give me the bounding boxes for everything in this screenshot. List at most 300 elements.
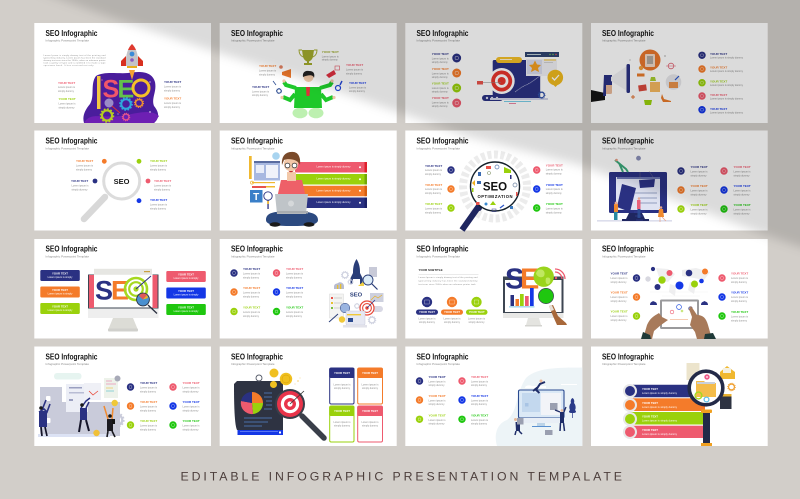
labels and markers: YOUR TEXT xyxy=(432,52,449,56)
heading: SEO Infographic xyxy=(46,29,98,38)
labels: simply dummy xyxy=(164,106,181,109)
labels: Lorem ipsum is xyxy=(252,90,270,94)
labels and markers: YOUR TEXT xyxy=(471,413,488,417)
markers and labels: Lorem ipsum is simply dummy xyxy=(710,98,744,100)
heading: SEO Infographic xyxy=(231,137,283,146)
labels and markers: Lorem ipsum is xyxy=(690,190,708,192)
text block: specimen book. It has survived not only xyxy=(44,64,94,67)
labels and markers: Lorem ipsum is xyxy=(734,190,751,192)
labels: YOUR TEXT xyxy=(164,80,181,84)
subtitle: Infographic Powerpoint Template xyxy=(416,362,461,366)
labels and markers: simply dummy xyxy=(734,174,750,178)
three step pills xyxy=(416,297,488,324)
diagonal light and shadow overlay xyxy=(40,0,800,260)
text block xyxy=(44,54,106,67)
panel: slide 14 analytics board and cards xyxy=(220,346,397,446)
stacked list bars: Lorem ipsum is simply dummy xyxy=(642,433,678,436)
illustration: people at dashboard xyxy=(38,373,124,437)
labels and dots: Lorem ipsum is xyxy=(76,164,94,168)
panel: slide 3 target dashboard xyxy=(405,23,582,123)
icon: trophy xyxy=(299,50,317,65)
right buttons: Lorem ipsum is simply xyxy=(174,310,199,313)
labels: YOUR TEXT xyxy=(58,97,76,101)
illustration: purple blob with SEO letters and gears: E xyxy=(118,76,134,104)
subtitle: Infographic Powerpoint Template xyxy=(602,39,646,43)
labels and markers: simply dummy xyxy=(734,194,750,196)
subtitle block xyxy=(418,268,478,286)
labels and markers: Lorem ipsum is xyxy=(734,208,751,212)
labels and markers: simply dummy xyxy=(286,315,303,318)
illustration: design tools xyxy=(249,152,280,209)
labels and markers: YOUR TEXT xyxy=(546,202,563,206)
illustration: desktop monitor with SEO target xyxy=(88,269,158,332)
labels and markers: Lorem ipsum is xyxy=(425,169,443,172)
labels and markers: Lorem ipsum is xyxy=(432,87,449,90)
labels and markers: simply dummy xyxy=(182,390,199,394)
subtitle: Infographic Powerpoint Template xyxy=(602,146,646,150)
three step pills: Lorem ipsum is xyxy=(444,318,461,320)
subtitle: Infographic Powerpoint Template xyxy=(231,362,275,366)
markers and labels: YOUR TEXT xyxy=(710,52,727,56)
stacked list bars: YOUR TEXT xyxy=(642,387,658,391)
illustration: shopping icons cluster xyxy=(629,50,681,105)
labels and markers: YOUR TEXT xyxy=(546,164,563,168)
four cards: simply dummy xyxy=(362,387,379,390)
three step pills: Lorem ipsum is xyxy=(419,318,436,320)
labels and markers: simply dummy xyxy=(610,300,627,303)
labels: simply dummy xyxy=(349,90,366,93)
labels and markers: simply dummy xyxy=(140,428,157,432)
illustration: world map dots xyxy=(645,267,710,305)
labels and markers: Lorem ipsum is xyxy=(428,380,446,384)
panel: slide 4 megaphone xyxy=(591,23,768,123)
labels and markers xyxy=(610,272,749,322)
four cards xyxy=(329,368,383,442)
labels: YOUR TEXT xyxy=(322,50,339,54)
heading: SEO Infographic xyxy=(602,352,654,361)
left buttons xyxy=(40,270,80,314)
labels and markers: YOUR TEXT xyxy=(731,272,748,276)
labels and markers: simply dummy xyxy=(140,390,157,394)
labels and markers: Lorem ipsum is xyxy=(610,315,628,318)
four cards: simply dummy xyxy=(334,387,351,390)
heading: SEO Infographic xyxy=(231,29,283,38)
four cards: YOUR TEXT xyxy=(362,409,378,413)
labels and markers: simply dummy xyxy=(182,428,199,432)
subtitle: Infographic Powerpoint Template xyxy=(602,362,646,366)
labels and markers: Lorem ipsum is xyxy=(731,316,749,318)
heading: SEO Infographic xyxy=(46,352,98,361)
stacked list bars: Lorem ipsum is simply dummy xyxy=(642,420,678,422)
panel: slide 9 monitor with SEO xyxy=(34,239,211,338)
labels and markers: simply dummy xyxy=(432,105,448,108)
labels and markers: YOUR TEXT xyxy=(690,184,708,188)
subtitle block: YOUR SUBTITLE xyxy=(418,268,443,272)
labels and markers: Lorem ipsum is xyxy=(140,406,158,408)
labels and markers xyxy=(416,375,489,425)
heading: SEO Infographic xyxy=(416,352,469,361)
labels and markers: YOUR TEXT xyxy=(182,381,200,385)
four cards: Lorem ipsum is xyxy=(334,384,351,386)
labels and markers: YOUR TEXT xyxy=(432,96,449,100)
panel: slide 13 team at dashboard xyxy=(34,346,211,446)
labels and markers: Lorem ipsum is xyxy=(432,58,449,60)
right buttons: Lorem ipsum is simply xyxy=(174,294,199,296)
labels: simply dummy xyxy=(252,94,269,97)
panel: slide 15 desktop team xyxy=(405,346,582,446)
labels: simply dummy xyxy=(322,58,338,62)
text block: Lorem Ipsum is simply dummy text of the printing and xyxy=(44,54,106,57)
labels and dots: YOUR TEXT xyxy=(76,159,93,163)
labels and markers xyxy=(432,52,461,108)
labels and markers: Lorem ipsum is xyxy=(243,292,261,294)
labels and markers: Lorem ipsum is xyxy=(731,296,749,299)
lens with SEO optimization xyxy=(462,154,527,230)
labels and markers: YOUR TEXT xyxy=(690,203,708,207)
three step pills: simply dummy xyxy=(469,321,485,324)
labels and markers: simply dummy xyxy=(428,403,445,406)
illustration: desktop monitor with SEO target: S xyxy=(95,276,113,306)
left buttons: Lorem ipsum is simply xyxy=(48,309,73,312)
panel: slide 6 man with laptop xyxy=(220,130,397,230)
stacked list bars: Lorem ipsum is simply dummy xyxy=(642,392,678,395)
labels and dots: YOUR TEXT xyxy=(154,179,171,183)
labels and markers: YOUR TEXT xyxy=(432,82,449,86)
illustration: monitor, target and check badge xyxy=(477,52,563,104)
labels and markers: Lorem ipsum is xyxy=(182,386,200,390)
labels and markers: YOUR TEXT xyxy=(731,290,748,294)
left buttons: Lorem ipsum is simply xyxy=(48,276,73,279)
labels and markers: simply dummy xyxy=(734,212,750,216)
labels and markers: Lorem ipsum is xyxy=(690,208,708,212)
labels and markers: YOUR TEXT xyxy=(471,394,488,398)
labels: YOUR TEXT xyxy=(346,63,363,67)
labels and markers: simply dummy xyxy=(690,194,707,196)
labels and markers: simply dummy xyxy=(690,174,707,178)
stacked list bars: YOUR TEXT xyxy=(642,428,658,432)
labels and markers: simply dummy xyxy=(140,410,157,412)
four cards: simply dummy xyxy=(334,424,351,428)
labels and dots: YOUR TEXT xyxy=(150,159,167,163)
illustration: monitor with people xyxy=(597,156,672,222)
stacked bars: Lorem ipsum is simply dummy xyxy=(316,166,351,169)
labels and markers: Lorem ipsum is xyxy=(432,102,449,104)
labels and markers: Lorem ipsum is xyxy=(243,272,261,276)
labels: Lorem ipsum is xyxy=(164,102,182,105)
labels: YOUR TEXT xyxy=(164,96,181,100)
labels and markers: simply dummy xyxy=(428,422,445,425)
stacked bars: Lorem ipsum is simply dummy xyxy=(316,178,351,181)
labels and markers: YOUR TEXT xyxy=(182,419,200,423)
labels and dots: simply dummy xyxy=(76,168,93,172)
illustration: man with glasses and laptop xyxy=(266,152,318,227)
labels: simply dummy xyxy=(259,74,276,76)
markers and labels: YOUR TEXT xyxy=(710,93,727,97)
panel: slide 12 tablet and network map xyxy=(591,239,768,339)
stacked bars xyxy=(290,162,367,208)
icons around businessman xyxy=(273,65,342,94)
labels and markers: simply dummy xyxy=(610,319,627,322)
labels and dots: simply dummy xyxy=(150,168,167,172)
illustration: monitor with SEO, globe and bar chart: E xyxy=(520,264,539,296)
labels and markers: YOUR TEXT xyxy=(425,164,442,168)
labels and markers: simply dummy xyxy=(432,61,448,64)
labels and markers: Lorem ipsum is xyxy=(243,311,261,314)
labels and markers: simply dummy xyxy=(286,276,303,280)
stacked bars: Lorem ipsum is simply dummy xyxy=(316,189,351,192)
labels and markers: Lorem ipsum is xyxy=(471,400,489,402)
labels and dots: YOUR TEXT xyxy=(150,198,167,202)
labels and markers: YOUR TEXT xyxy=(243,306,260,310)
subtitle: Infographic Powerpoint Template xyxy=(416,254,461,258)
illustration: pie chart board, coins and target magnifier xyxy=(234,368,324,438)
illustration: rocket, gears, target, SEO xyxy=(329,259,384,328)
labels and dots: Lorem ipsum is xyxy=(150,204,168,206)
labels and markers: YOUR TEXT xyxy=(731,310,748,314)
labels and markers: Lorem ipsum is xyxy=(182,424,200,428)
subtitle: Infographic Powerpoint Template xyxy=(46,254,90,258)
markers and labels: Lorem ipsum is simply dummy xyxy=(710,70,744,73)
labels and markers: simply dummy xyxy=(425,173,442,176)
labels and markers: simply dummy xyxy=(425,192,442,195)
labels and markers: simply dummy xyxy=(546,192,562,195)
illustration: monitor with SEO, globe and bar chart xyxy=(503,264,567,326)
labels and markers: simply dummy xyxy=(690,212,707,216)
labels: simply dummy xyxy=(58,106,75,110)
labels and markers: YOUR TEXT xyxy=(734,165,751,169)
labels and markers: Lorem ipsum is xyxy=(140,424,158,428)
icon: rocket xyxy=(121,44,143,80)
magnifier with SEO: SEO xyxy=(114,177,130,186)
illustration: design tools: T xyxy=(253,192,259,203)
heading: SEO Infographic xyxy=(602,245,654,254)
caption: EDITABLE INFOGRAPHIC PRESENTATION TEMPALATE xyxy=(180,470,622,484)
labels and markers: Lorem ipsum is xyxy=(734,170,751,174)
labels and dots: Lorem ipsum is xyxy=(72,184,89,188)
labels and dots xyxy=(71,159,172,210)
labels: Lorem ipsum is xyxy=(58,86,76,89)
labels and markers xyxy=(230,267,304,318)
labels and markers: simply dummy xyxy=(286,296,303,298)
labels and markers: Lorem ipsum is xyxy=(731,277,749,280)
labels and markers: Lorem ipsum is xyxy=(428,419,446,422)
labels and markers: simply dummy xyxy=(425,212,442,214)
labels and markers: simply dummy xyxy=(471,403,488,406)
labels and markers: simply dummy xyxy=(471,384,488,387)
labels and markers: Lorem ipsum is xyxy=(546,188,563,191)
subtitle: Infographic Powerpoint Template xyxy=(46,146,90,150)
labels: YOUR TEXT xyxy=(252,85,269,89)
heading: SEO Infographic xyxy=(231,352,283,361)
text block: took a galley of type and scrambled it to make a type xyxy=(44,61,106,64)
heading: SEO Infographic xyxy=(416,29,469,38)
labels and markers: simply dummy xyxy=(610,281,627,284)
subtitle: Infographic Powerpoint Template xyxy=(46,362,90,366)
three step pills: simply dummy xyxy=(419,321,436,324)
labels and markers: Lorem ipsum is xyxy=(610,296,628,299)
panel: slide 1 rocket SEO xyxy=(34,23,211,123)
four cards: YOUR TEXT xyxy=(362,371,378,375)
labels and markers: Lorem ipsum is xyxy=(425,208,443,210)
labels and markers: YOUR TEXT xyxy=(140,381,157,385)
panel: slide 8 monitor team xyxy=(591,130,768,230)
labels and markers: simply dummy xyxy=(432,76,448,79)
labels and markers xyxy=(677,165,751,216)
labels: YOUR TEXT xyxy=(349,81,366,85)
labels and markers: YOUR TEXT xyxy=(243,286,260,290)
right buttons: YOUR TEXT xyxy=(178,289,194,293)
labels: simply dummy xyxy=(346,72,363,76)
left buttons: YOUR TEXT xyxy=(52,288,68,292)
right buttons: YOUR TEXT xyxy=(178,306,194,310)
labels: Lorem ipsum is xyxy=(322,56,339,58)
subtitle block: text ever since 1500s when an unknown printer took xyxy=(418,283,476,286)
illustration: monitor with SEO, globe and bar chart: S xyxy=(505,264,524,296)
labels and markers: YOUR TEXT xyxy=(428,375,446,379)
labels and markers: Lorem ipsum is xyxy=(140,386,158,390)
markers and labels: YOUR TEXT xyxy=(710,66,727,70)
labels xyxy=(252,50,367,97)
labels and markers: YOUR TEXT xyxy=(471,375,488,379)
labels and markers xyxy=(127,381,200,432)
labels and markers: YOUR TEXT xyxy=(546,183,563,187)
labels and markers: YOUR TEXT xyxy=(286,267,303,271)
labels and markers: Lorem ipsum is xyxy=(428,400,446,402)
labels and markers: simply dummy xyxy=(731,320,748,322)
three step pills: Lorem ipsum is xyxy=(468,318,486,320)
subtitle: Infographic Powerpoint Template xyxy=(416,39,461,43)
panel: slide 11 SEO monitor with bar chart xyxy=(405,239,582,338)
text block: dummy text ever since the 1500s, when an unknown printer xyxy=(44,59,106,62)
three step pills: YOUR TEXT xyxy=(419,310,435,314)
magnifier with SEO xyxy=(84,163,140,219)
labels and markers: YOUR TEXT xyxy=(425,183,442,187)
labels and markers: simply dummy xyxy=(182,410,199,412)
stacked list bars: YOUR TEXT xyxy=(642,415,658,419)
labels and markers: simply dummy xyxy=(428,384,445,387)
subtitle: Infographic Powerpoint Template xyxy=(231,254,275,258)
labels and dots: simply dummy xyxy=(150,208,167,210)
labels and markers: YOUR TEXT xyxy=(734,184,751,188)
subtitle block: Lorem Ipsum is simply dummy text of the printing and xyxy=(418,276,478,279)
labels: YOUR TEXT xyxy=(58,81,75,85)
labels and markers: simply dummy xyxy=(432,90,448,94)
labels and markers: Lorem ipsum is xyxy=(546,168,563,172)
subtitle: Infographic Powerpoint Template xyxy=(231,39,275,43)
labels and markers: Lorem ipsum is xyxy=(425,188,443,191)
heading: SEO Infographic xyxy=(602,29,654,38)
stacked list bars: Lorem ipsum is simply dummy xyxy=(642,406,678,409)
labels: Lorem ipsum is xyxy=(164,86,182,88)
labels and markers: Lorem ipsum is xyxy=(471,419,489,422)
lens with SEO optimization: OPTIMIZATION xyxy=(478,194,512,199)
labels and markers: simply dummy xyxy=(731,281,748,284)
heading: SEO Infographic xyxy=(231,245,283,254)
labels and markers: simply dummy xyxy=(546,172,562,176)
text block: typesetting industry. Lorem Ipsum has been the standard xyxy=(44,56,106,59)
labels and markers: YOUR TEXT xyxy=(610,290,628,294)
four cards: Lorem ipsum is xyxy=(334,421,351,424)
labels and markers: simply dummy xyxy=(243,276,260,280)
labels and markers: YOUR TEXT xyxy=(286,306,303,310)
labels and markers: YOUR TEXT xyxy=(286,286,303,290)
stacked bars: Lorem ipsum is simply dummy xyxy=(316,201,351,204)
stacked list bars xyxy=(623,384,705,439)
illustration: desktop monitor with SEO target: E xyxy=(111,276,129,306)
labels and markers: simply dummy xyxy=(731,300,748,303)
subtitle: Infographic Powerpoint Template xyxy=(416,146,461,150)
illustration: purple blob with SEO letters and gears xyxy=(83,72,159,123)
markers and labels: YOUR TEXT xyxy=(710,107,727,111)
labels and markers: Lorem ipsum is xyxy=(286,311,304,314)
illustration: magnifier with folder and office items xyxy=(686,363,735,446)
labels and markers: simply dummy xyxy=(243,315,260,318)
labels and markers: YOUR TEXT xyxy=(428,413,446,417)
labels and markers: YOUR TEXT xyxy=(734,203,751,207)
panel: slide 7 SEO optimization lens xyxy=(405,130,582,230)
four cards: YOUR TEXT xyxy=(334,409,350,413)
labels: Lorem ipsum is xyxy=(259,70,277,72)
labels and markers: YOUR TEXT xyxy=(690,165,708,169)
labels and markers: simply dummy xyxy=(243,296,260,298)
labels and markers: YOUR TEXT xyxy=(432,67,449,71)
labels and markers: Lorem ipsum is xyxy=(471,380,489,384)
labels: YOUR TEXT xyxy=(259,64,276,68)
illustration: tablet in hands xyxy=(641,300,716,339)
heading: SEO Infographic xyxy=(416,137,469,146)
labels: simply dummy xyxy=(164,90,181,92)
illustration: rocket, gears, target, SEO: SEO xyxy=(350,292,363,298)
labels and markers: Lorem ipsum is xyxy=(432,72,449,76)
labels and markers: YOUR TEXT xyxy=(140,400,157,404)
labels and markers: simply dummy xyxy=(546,212,562,214)
labels and markers xyxy=(425,164,563,214)
labels and markers: YOUR TEXT xyxy=(140,419,157,423)
panel: slide 2 businessman xyxy=(220,23,397,123)
labels and markers: simply dummy xyxy=(471,422,488,425)
subtitle: Infographic Powerpoint Template xyxy=(46,39,90,43)
markers and labels: Lorem ipsum is simply dummy xyxy=(710,84,744,87)
heading: SEO Infographic xyxy=(416,245,469,254)
labels and markers: YOUR TEXT xyxy=(610,310,628,314)
labels: Lorem ipsum is xyxy=(58,102,76,106)
labels and dots: simply dummy xyxy=(72,188,88,192)
labels: simply dummy xyxy=(58,90,75,93)
left buttons: Lorem ipsum is simply xyxy=(48,292,73,296)
labels: Lorem ipsum is xyxy=(349,86,367,90)
stacked list bars: YOUR TEXT xyxy=(642,401,658,405)
labels and dots: Lorem ipsum is xyxy=(150,164,168,168)
illustration: purple blob with SEO letters and gears: S xyxy=(102,76,119,104)
labels and markers: YOUR TEXT xyxy=(428,394,446,398)
labels and dots: Lorem ipsum is xyxy=(154,184,172,188)
four cards: YOUR TEXT xyxy=(334,371,350,375)
left buttons: YOUR TEXT xyxy=(52,272,68,276)
labels: Lorem ipsum is xyxy=(346,68,364,72)
labels and markers: Lorem ipsum is xyxy=(690,170,708,174)
labels and markers: Lorem ipsum is xyxy=(182,406,200,408)
four cards: Lorem ipsum is xyxy=(362,384,379,386)
four cards: simply dummy xyxy=(362,424,379,428)
lens with SEO optimization: SEO xyxy=(483,182,507,194)
labels and dots: simply dummy xyxy=(154,188,171,192)
four cards: Lorem ipsum is xyxy=(362,421,379,424)
labels and dots: YOUR TEXT xyxy=(71,179,88,183)
markers and labels xyxy=(698,52,744,114)
left buttons: YOUR TEXT xyxy=(52,304,68,308)
illustration: blue backdrop, monitor and people xyxy=(496,368,582,446)
right buttons: YOUR TEXT xyxy=(178,272,194,276)
